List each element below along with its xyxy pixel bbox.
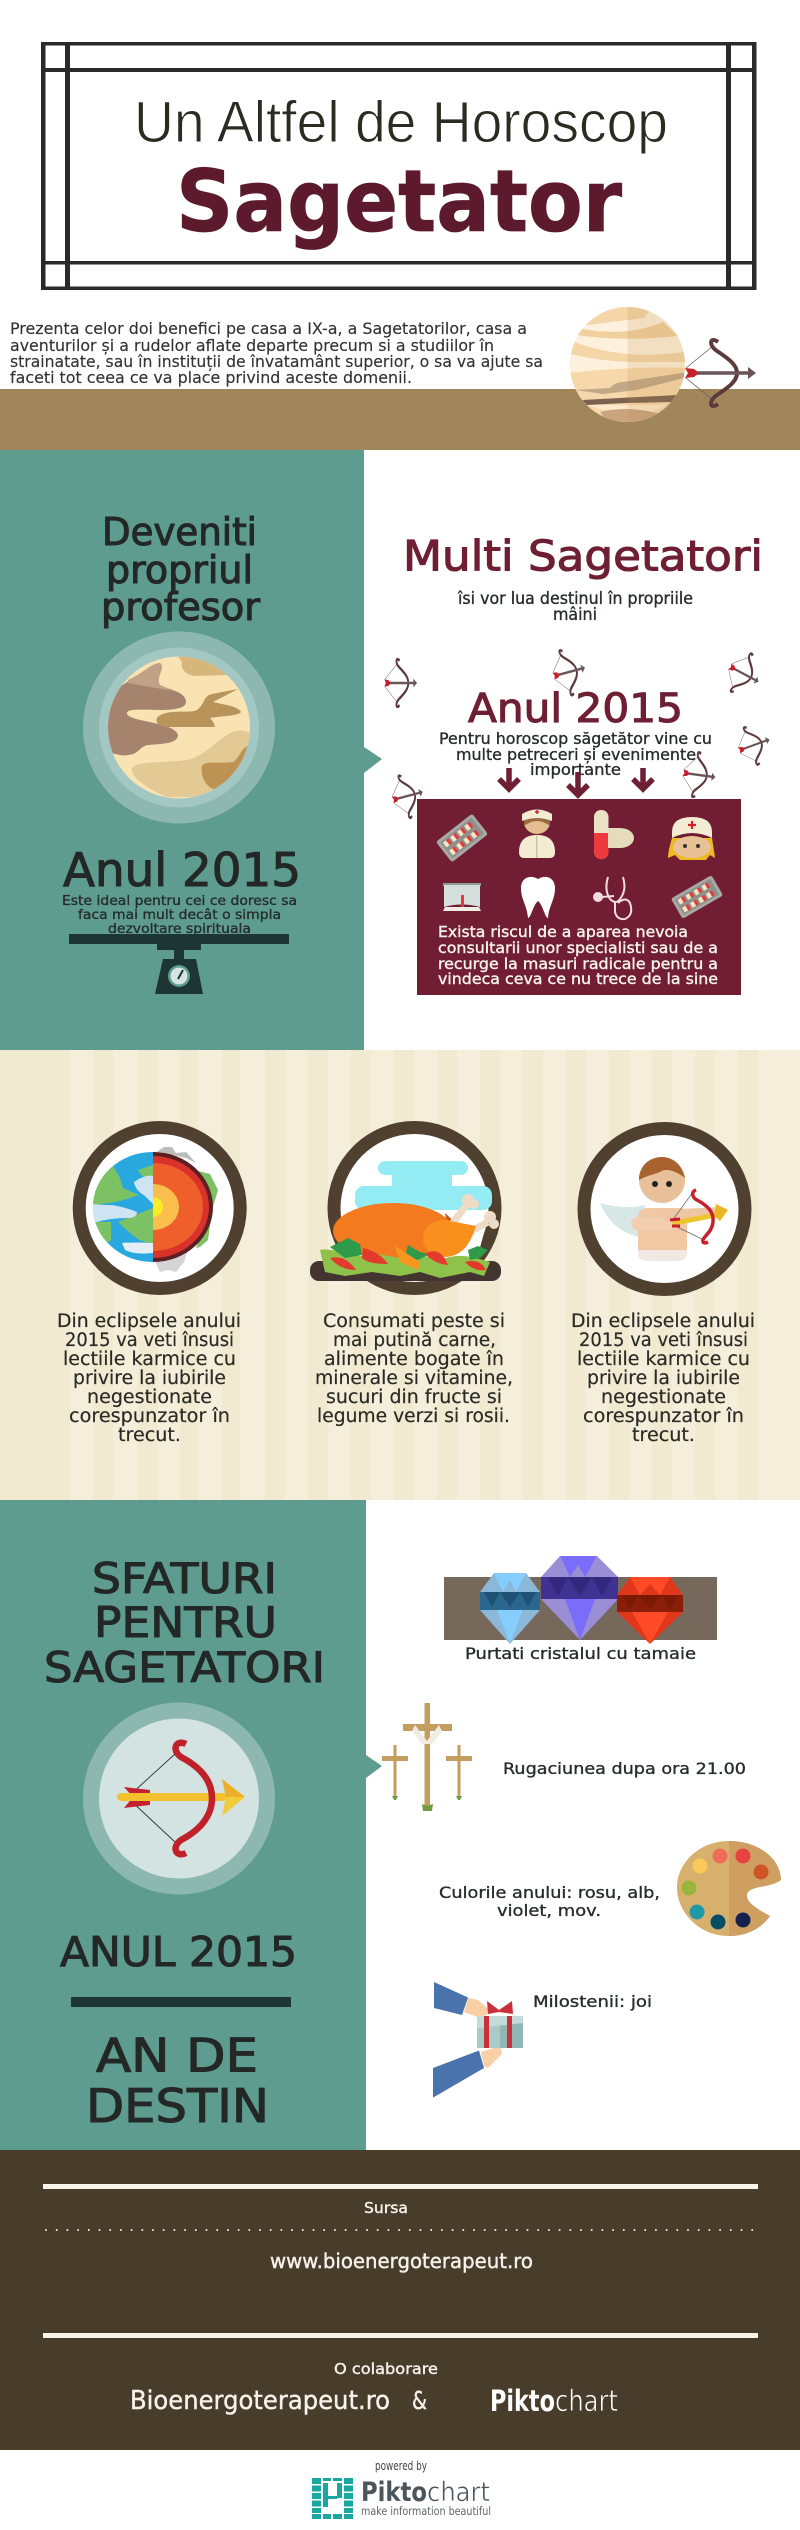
heading: Deveniti propriul profesor: Deveniti xyxy=(102,510,257,554)
text: Pentru horoscop: Pentru horoscop săgetător vine cu xyxy=(439,729,712,748)
logo: Piktochart white xyxy=(490,2384,618,2418)
intro text: strainatate, sau în instituții de învatamânt superior, o sa va ajute sa xyxy=(10,352,543,371)
icon: pill blister 2 xyxy=(671,875,723,919)
text: ampersand: & xyxy=(412,2386,427,2415)
text: powered by: powered by xyxy=(375,2459,427,2473)
text: column 2: alimente bogate în xyxy=(324,1349,504,1370)
panel: footer xyxy=(0,2150,800,2450)
icon: stethoscope xyxy=(594,877,631,919)
heading: Deveniti propriul profesor: propriul xyxy=(106,548,253,592)
panel: medical box xyxy=(417,799,741,995)
logo: Piktochart white: chart xyxy=(555,2384,618,2418)
icon: bow and arrow xyxy=(685,340,756,406)
text: Culorile anului: violet, mov. xyxy=(497,1901,601,1920)
heading: Deveniti propriul profesor xyxy=(101,510,260,629)
logo: Piktochart text: Pikto xyxy=(361,2477,427,2508)
text: O colaborare: O colaborare xyxy=(334,2360,438,2378)
panel: striped beige section xyxy=(0,1050,800,1500)
text: column 3: 2015 va veti însusi xyxy=(579,1330,748,1351)
text: column 2: legume verzi si rosii. xyxy=(317,1406,510,1427)
text: Este ideal: dezvoltare spirituala xyxy=(108,921,251,937)
icon: scale xyxy=(69,934,289,994)
icon: pills xyxy=(594,810,634,859)
text: column 1: trecut. xyxy=(118,1425,181,1446)
text: Pentru horoscop xyxy=(439,729,712,779)
icon: cupid in ring xyxy=(578,1122,752,1296)
icon: bow and arrow in circle xyxy=(83,1702,275,1894)
text: Este ideal: faca mai mult decât o simpla xyxy=(78,907,281,923)
icon: book xyxy=(443,883,481,911)
text: Exista riscul: recurge la masuri radicale pentru a xyxy=(438,955,718,973)
text: destinul: mâini xyxy=(553,605,597,624)
text: Culorile anului xyxy=(439,1883,660,1920)
text: Sursa: Sursa xyxy=(364,2199,408,2217)
brown band xyxy=(0,389,800,450)
heading: An de destin: AN DE xyxy=(96,2028,258,2082)
panel: teal left section 2 xyxy=(0,1500,382,2150)
text: Exista riscul xyxy=(438,923,718,988)
text: column 3: Din eclipsele anului xyxy=(571,1311,755,1332)
heading: Sfaturi pentru sagetatori: SAGETATORI xyxy=(44,1643,325,1692)
text: column 1: Din eclipsele anului xyxy=(57,1311,241,1332)
text: column 2: Consumati peste si xyxy=(323,1311,505,1332)
text: Purtati cristalul: Purtati cristalul cu tamaie xyxy=(465,1644,696,1663)
text: column 2: mai putină carne, xyxy=(333,1330,496,1351)
text: Exista riscul: consultarii unor specialisti sau de a xyxy=(438,939,718,957)
text: column 1: lectiile karmice cu xyxy=(63,1349,236,1370)
text: column 3: trecut. xyxy=(632,1425,695,1446)
text: column 1: corespunzator în xyxy=(69,1406,230,1427)
intro text: Prezenta celor doi benefici pe casa a IX-a, a Sagetatorilor, casa a xyxy=(10,319,527,338)
text: column 2: sucuri din fructe si xyxy=(326,1387,502,1408)
text: column 1: privire la iubirile xyxy=(73,1368,226,1389)
text: url: www.bioenergoterapeut.ro xyxy=(270,2249,533,2273)
panel: teal left section 1 xyxy=(0,450,382,1050)
heading: Sfaturi pentru sagetatori: PENTRU xyxy=(94,1598,277,1647)
heading: Anul 2015: ANUL 2015 xyxy=(60,1928,297,1976)
icon: gift in hands xyxy=(433,1982,523,2098)
icon: planet in circle xyxy=(83,632,275,824)
panel: powered by xyxy=(312,2459,491,2519)
text: Pentru horoscop: importante xyxy=(530,760,621,779)
icon: pill blister xyxy=(436,814,488,862)
icon: planet with bow xyxy=(568,305,756,425)
heading: Multi Sagetatori: Multi Sagetatori xyxy=(403,532,763,580)
icon: turkey in ring xyxy=(310,1121,502,1295)
heading: Anul 2015: Anul 2015 xyxy=(63,843,301,897)
text: column 2: minerale si vitamine, xyxy=(315,1368,513,1389)
icon: blonde nurse xyxy=(668,817,715,860)
icon: earth in ring xyxy=(73,1121,247,1295)
heading: Anul 2015: Anul 2015 xyxy=(468,686,683,732)
text: column 1: negestionate xyxy=(87,1387,212,1408)
heading: Deveniti propriul profesor: profesor xyxy=(101,585,260,629)
logo: Piktochart mark xyxy=(312,2478,353,2519)
icon: nurse xyxy=(519,810,555,858)
text: column 3 xyxy=(571,1311,755,1446)
text: column 3: corespunzator în xyxy=(583,1406,744,1427)
text: Exista riscul: vindeca ceva ce nu trece de la sine xyxy=(438,970,718,988)
text: column 3: privire la iubirile xyxy=(587,1368,740,1389)
heading: An de destin xyxy=(86,2028,269,2133)
icon: crystals xyxy=(444,1556,717,1644)
title: Sagetator: Sagetator xyxy=(176,152,623,252)
logo: Piktochart text: chart xyxy=(427,2477,490,2508)
text: Este ideal xyxy=(62,893,297,937)
text: Pentru horoscop: multe petreceri și evenimente xyxy=(456,745,696,764)
logo: Piktochart white: Pikto xyxy=(490,2384,555,2418)
title: Un Altfel de Horoscop: Un Altfel de Horoscop xyxy=(134,90,668,155)
text: column 1: 2015 va veti însusi xyxy=(65,1330,234,1351)
text: Culorile anului: Culorile anului: rosu, alb, xyxy=(439,1883,660,1902)
text: column 1 xyxy=(57,1311,241,1446)
text: Este ideal: Este ideal pentru cei ce doresc sa xyxy=(62,893,297,909)
intro text xyxy=(10,319,543,387)
text: Exista riscul: Exista riscul de a aparea nevoia xyxy=(438,923,688,941)
icon: palette xyxy=(677,1841,781,1936)
logo: Piktochart text xyxy=(361,2477,491,2518)
panel: right section 1 xyxy=(384,532,776,995)
heading: An de destin: DESTIN xyxy=(86,2079,269,2133)
heading: Sfaturi pentru sagetatori xyxy=(44,1554,325,1692)
title frame xyxy=(41,42,756,290)
text: Rugaciunea: Rugaciunea dupa ora 21.00 xyxy=(503,1759,746,1778)
icon: crosses xyxy=(382,1703,472,1811)
text: destinul: îsi vor lua destinul în propriile xyxy=(457,589,693,608)
intro text: aventurilor și a rudelor aflate departe precum si a studiilor în xyxy=(10,336,494,355)
icon: scattered bows xyxy=(384,645,776,821)
text: destinul xyxy=(457,589,693,624)
text: Milostenii: Milostenii: joi xyxy=(533,1992,652,2011)
logo: Piktochart text: make information beautiful xyxy=(361,2504,491,2518)
text: Bioenergoterapeut.ro: Bioenergoterapeut.ro xyxy=(130,2386,390,2416)
text: column 3: lectiile karmice cu xyxy=(577,1349,750,1370)
icon: down arrows xyxy=(499,768,653,795)
panel: header xyxy=(0,0,800,389)
heading: Sfaturi pentru sagetatori: SFATURI xyxy=(92,1554,277,1603)
text: column 2 xyxy=(315,1311,513,1427)
icon: tooth xyxy=(521,877,555,918)
text: column 3: negestionate xyxy=(601,1387,726,1408)
divider bar xyxy=(71,1997,291,2007)
intro text: faceti tot ceea ce va place privind aceste domenii. xyxy=(10,368,412,387)
panel: tips xyxy=(382,1556,781,2098)
